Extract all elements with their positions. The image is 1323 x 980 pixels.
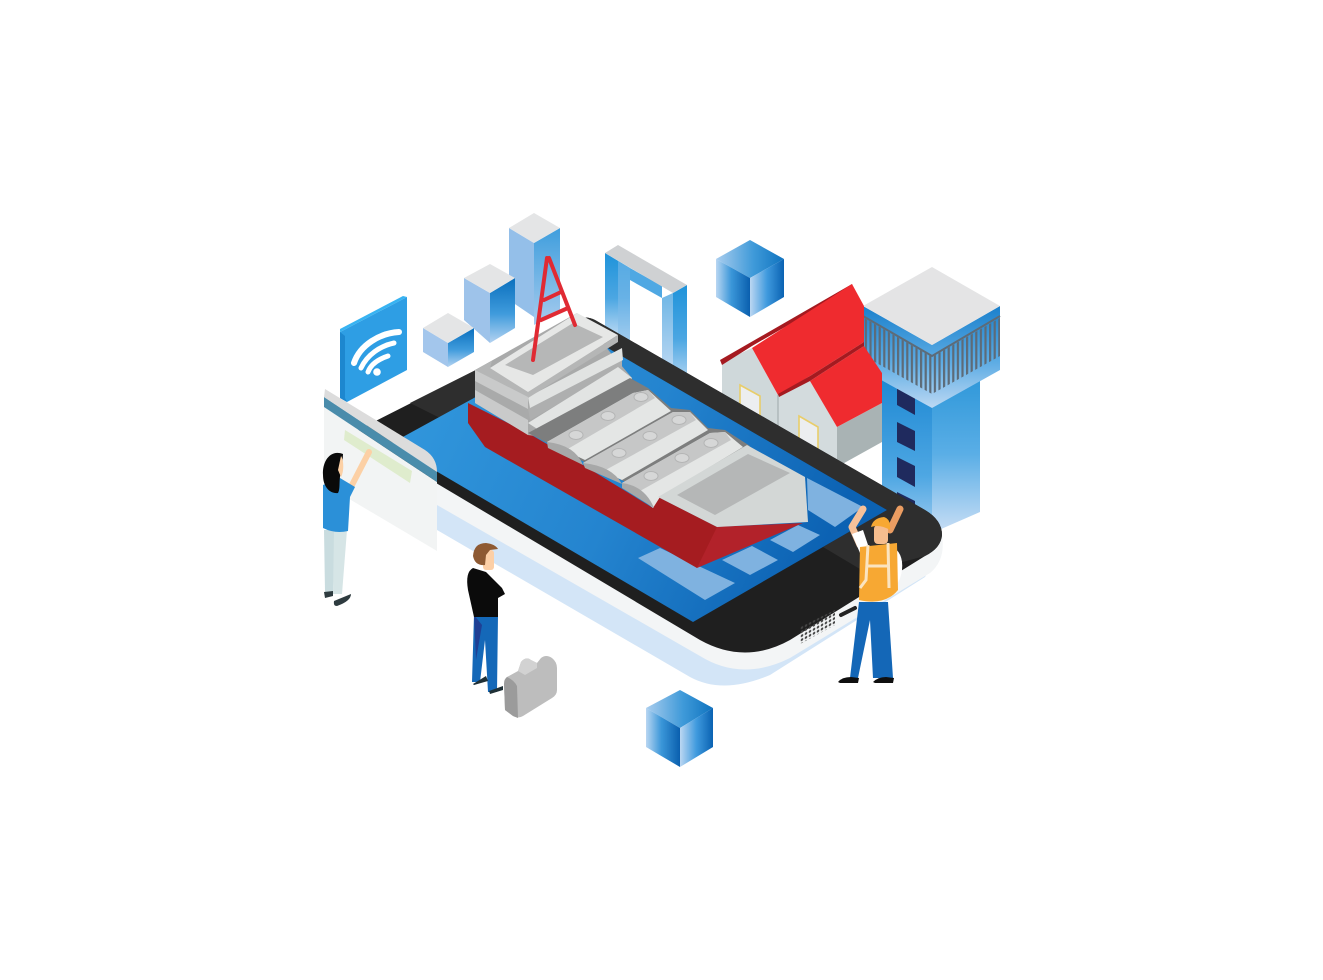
icon: floating cube bottom bbox=[646, 690, 713, 767]
cargo hatches bbox=[547, 390, 671, 460]
head bbox=[874, 525, 888, 544]
hatch pegs bbox=[569, 392, 718, 480]
trousers bbox=[850, 602, 893, 678]
bar chart blocks bbox=[423, 213, 560, 367]
shoes bbox=[473, 676, 488, 685]
phone white body bbox=[437, 480, 943, 670]
shoes bbox=[324, 591, 333, 598]
glass panel bbox=[324, 389, 437, 551]
hull bbox=[468, 403, 717, 568]
gate frame bbox=[605, 245, 687, 392]
bow deck bbox=[658, 445, 808, 527]
green bar bbox=[344, 430, 412, 483]
superstructure base bbox=[475, 313, 632, 437]
ship bbox=[468, 258, 808, 568]
shoes bbox=[838, 677, 859, 683]
sleeve bbox=[852, 530, 869, 553]
crane ladder bbox=[533, 258, 575, 360]
hair bbox=[323, 453, 343, 493]
vest bbox=[859, 543, 898, 602]
head bbox=[483, 550, 494, 570]
phone dark bezel bbox=[352, 318, 942, 652]
phone shadow base bbox=[437, 505, 935, 686]
trousers bbox=[472, 615, 498, 692]
phone bbox=[352, 318, 943, 686]
arm bbox=[352, 452, 369, 485]
icon: floating cube top bbox=[716, 240, 784, 317]
tower windows bbox=[897, 388, 915, 520]
woman bbox=[323, 452, 369, 606]
torso bbox=[467, 568, 505, 617]
shirt back bbox=[890, 545, 902, 590]
man bbox=[467, 543, 505, 694]
worker bbox=[838, 509, 902, 683]
icon: wifi tile bbox=[340, 296, 407, 402]
house bbox=[720, 284, 882, 470]
charging port bbox=[841, 608, 855, 615]
arms bbox=[852, 509, 863, 545]
speaker grille bbox=[800, 610, 835, 644]
screen tiles bbox=[638, 478, 863, 600]
legs bbox=[324, 530, 336, 592]
superstructure bbox=[475, 370, 528, 435]
shirt bbox=[323, 478, 355, 532]
icon: suitcase bbox=[504, 656, 557, 718]
deck base bbox=[528, 378, 750, 497]
tower bbox=[863, 267, 1000, 533]
phone screen bbox=[390, 336, 887, 622]
